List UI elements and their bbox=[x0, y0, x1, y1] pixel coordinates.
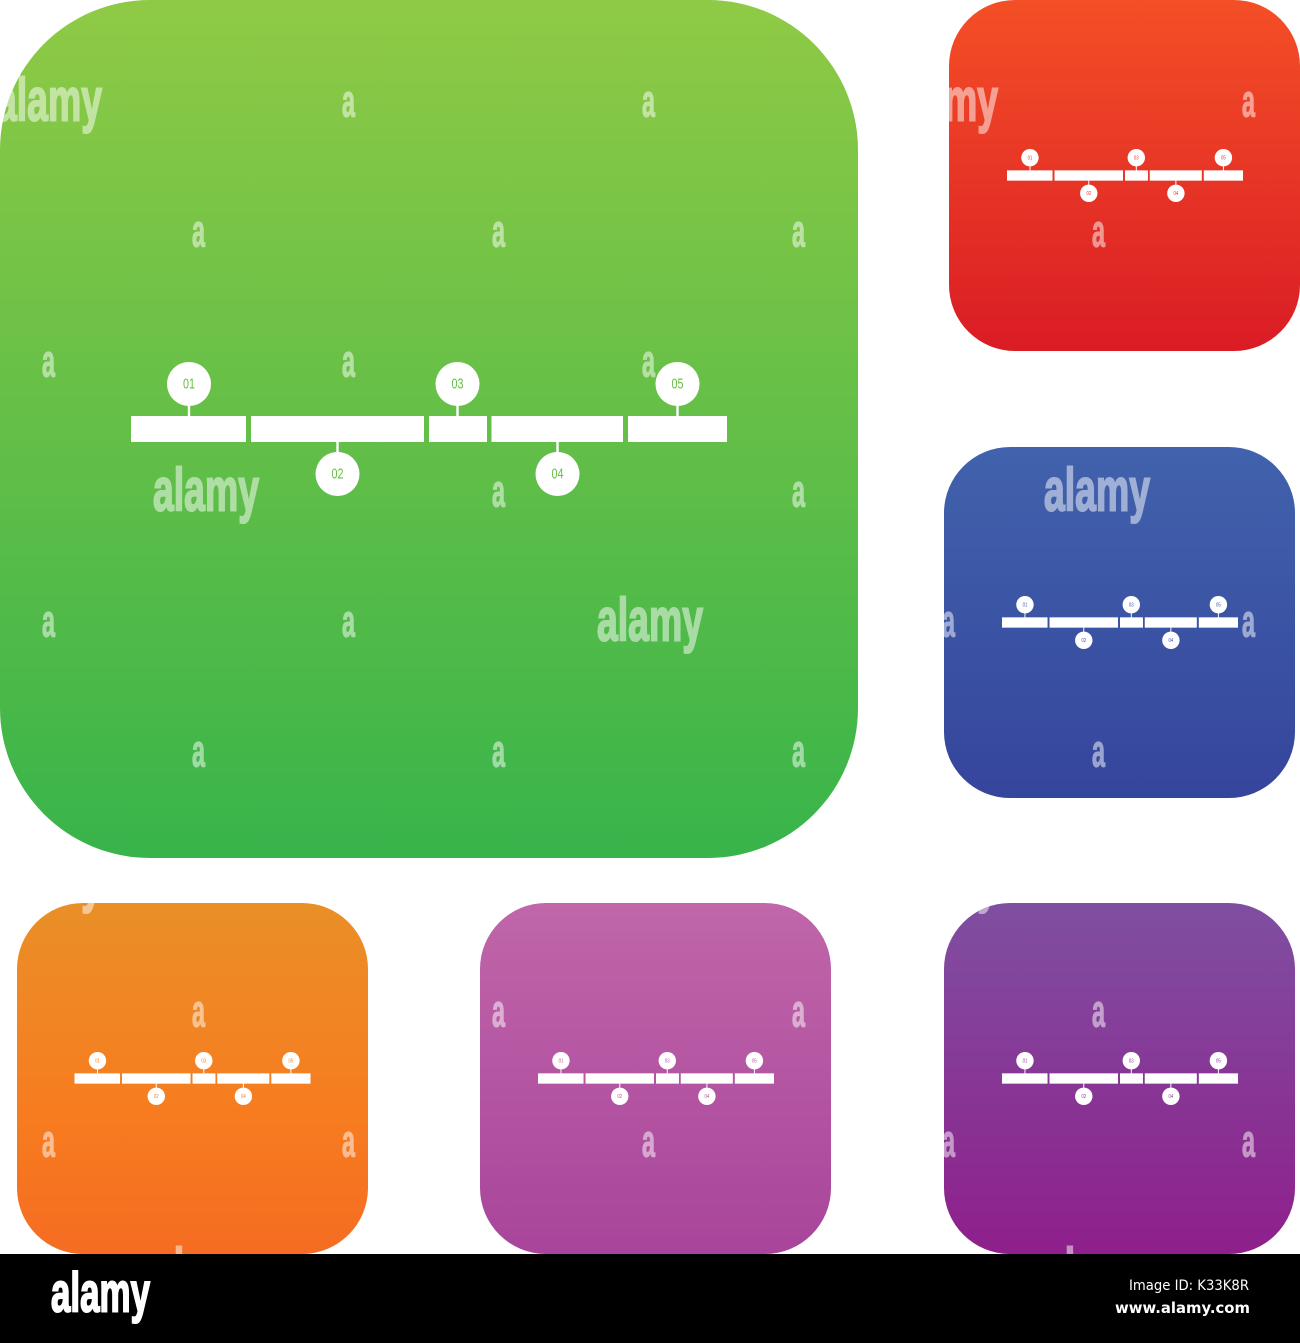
watermark pattern: a bbox=[342, 336, 356, 386]
timeline: green: 01 bbox=[183, 376, 195, 392]
timeline: orange: 05 bbox=[289, 1058, 293, 1064]
watermark pattern: a bbox=[192, 726, 206, 776]
watermark pattern: alamy bbox=[1044, 1236, 1150, 1304]
website: www.alamy.com bbox=[1115, 1299, 1250, 1317]
timeline: red: 04 bbox=[1174, 191, 1179, 197]
watermark pattern: a bbox=[1242, 1116, 1256, 1166]
timeline: red bbox=[1007, 149, 1243, 202]
watermark pattern: alamy bbox=[0, 846, 102, 914]
timeline: purple: 04 bbox=[1169, 1094, 1174, 1100]
timeline: red: 02 bbox=[1086, 191, 1091, 197]
timeline: magenta: 05 bbox=[752, 1058, 757, 1064]
watermark pattern: a bbox=[192, 206, 206, 256]
timeline: red: 05 bbox=[1221, 155, 1226, 161]
watermark pattern: a bbox=[792, 466, 806, 516]
watermark pattern: a bbox=[642, 336, 656, 386]
watermark pattern: alamy bbox=[0, 66, 102, 134]
timeline: magenta: 01 bbox=[559, 1058, 563, 1064]
watermark pattern: a bbox=[792, 986, 806, 1036]
timeline: blue: 05 bbox=[1216, 602, 1221, 608]
panel: purple bbox=[944, 903, 1295, 1254]
timeline: blue: 01 bbox=[1023, 602, 1027, 608]
timeline: red: 01 bbox=[1028, 155, 1032, 161]
timeline: magenta bbox=[538, 1052, 774, 1105]
timeline: magenta: 04 bbox=[705, 1094, 710, 1100]
timeline: purple: 05 bbox=[1216, 1058, 1221, 1064]
timeline: green bbox=[131, 362, 727, 496]
timeline: orange: 01 bbox=[95, 1058, 100, 1064]
timeline: blue: 02 bbox=[1081, 638, 1086, 644]
timeline: orange: 04 bbox=[241, 1094, 246, 1100]
watermark pattern: a bbox=[642, 76, 656, 126]
timeline: purple: 01 bbox=[1023, 1058, 1027, 1064]
timeline: purple: 02 bbox=[1081, 1094, 1086, 1100]
footer logo: alamy bbox=[51, 1260, 150, 1324]
watermark pattern: a bbox=[1092, 726, 1106, 776]
watermark pattern: a bbox=[1242, 596, 1256, 646]
watermark pattern: alamy bbox=[1044, 456, 1150, 524]
timeline: blue: 04 bbox=[1169, 638, 1174, 644]
panel: large green bbox=[0, 0, 858, 858]
timeline: blue: 03 bbox=[1129, 602, 1134, 608]
panel: blue bbox=[944, 447, 1295, 798]
watermark pattern: a bbox=[492, 466, 506, 516]
timeline: orange bbox=[74, 1052, 311, 1105]
timeline: green: 03 bbox=[452, 376, 464, 392]
watermark pattern: a bbox=[942, 596, 956, 646]
watermark pattern: alamy bbox=[892, 66, 998, 134]
image id: Image ID: K33K8R bbox=[1129, 1278, 1249, 1294]
watermark pattern: a bbox=[42, 1116, 56, 1166]
watermark pattern: a bbox=[1092, 206, 1106, 256]
watermark pattern: a bbox=[192, 986, 206, 1036]
timeline: purple: 03 bbox=[1129, 1058, 1134, 1064]
timeline: purple bbox=[1002, 1052, 1238, 1105]
panel: red bbox=[949, 0, 1300, 351]
timeline: green: 04 bbox=[552, 466, 564, 482]
panel: magenta bbox=[480, 903, 831, 1254]
timeline: red: 03 bbox=[1134, 155, 1139, 161]
watermark pattern: a bbox=[1092, 986, 1106, 1036]
footer bar bbox=[0, 1254, 1300, 1343]
watermark pattern: a bbox=[342, 76, 356, 126]
watermark pattern: a bbox=[942, 1116, 956, 1166]
watermark pattern: a bbox=[792, 726, 806, 776]
watermark pattern: a bbox=[342, 596, 356, 646]
watermark pattern: a bbox=[1242, 76, 1256, 126]
watermark pattern: alamy bbox=[153, 456, 259, 524]
watermark pattern: a bbox=[492, 206, 506, 256]
timeline: green: 05 bbox=[672, 376, 684, 392]
watermark pattern: alamy bbox=[153, 1236, 259, 1304]
timeline: orange: 03 bbox=[201, 1058, 206, 1064]
timeline: orange: 02 bbox=[154, 1094, 159, 1100]
watermark pattern: a bbox=[642, 1116, 656, 1166]
watermark pattern: a bbox=[492, 726, 506, 776]
panel: orange bbox=[17, 903, 368, 1254]
watermark pattern: alamy bbox=[892, 846, 998, 914]
timeline: magenta: 02 bbox=[617, 1094, 622, 1100]
watermark pattern: a bbox=[492, 986, 506, 1036]
timeline: green: 02 bbox=[332, 466, 344, 482]
watermark pattern: a bbox=[42, 596, 56, 646]
watermark pattern: alamy bbox=[597, 586, 703, 654]
timeline: magenta: 03 bbox=[665, 1058, 670, 1064]
watermark pattern: a bbox=[342, 1116, 356, 1166]
timeline: blue bbox=[1002, 596, 1238, 649]
watermark pattern: a bbox=[792, 206, 806, 256]
watermark pattern: a bbox=[42, 336, 56, 386]
